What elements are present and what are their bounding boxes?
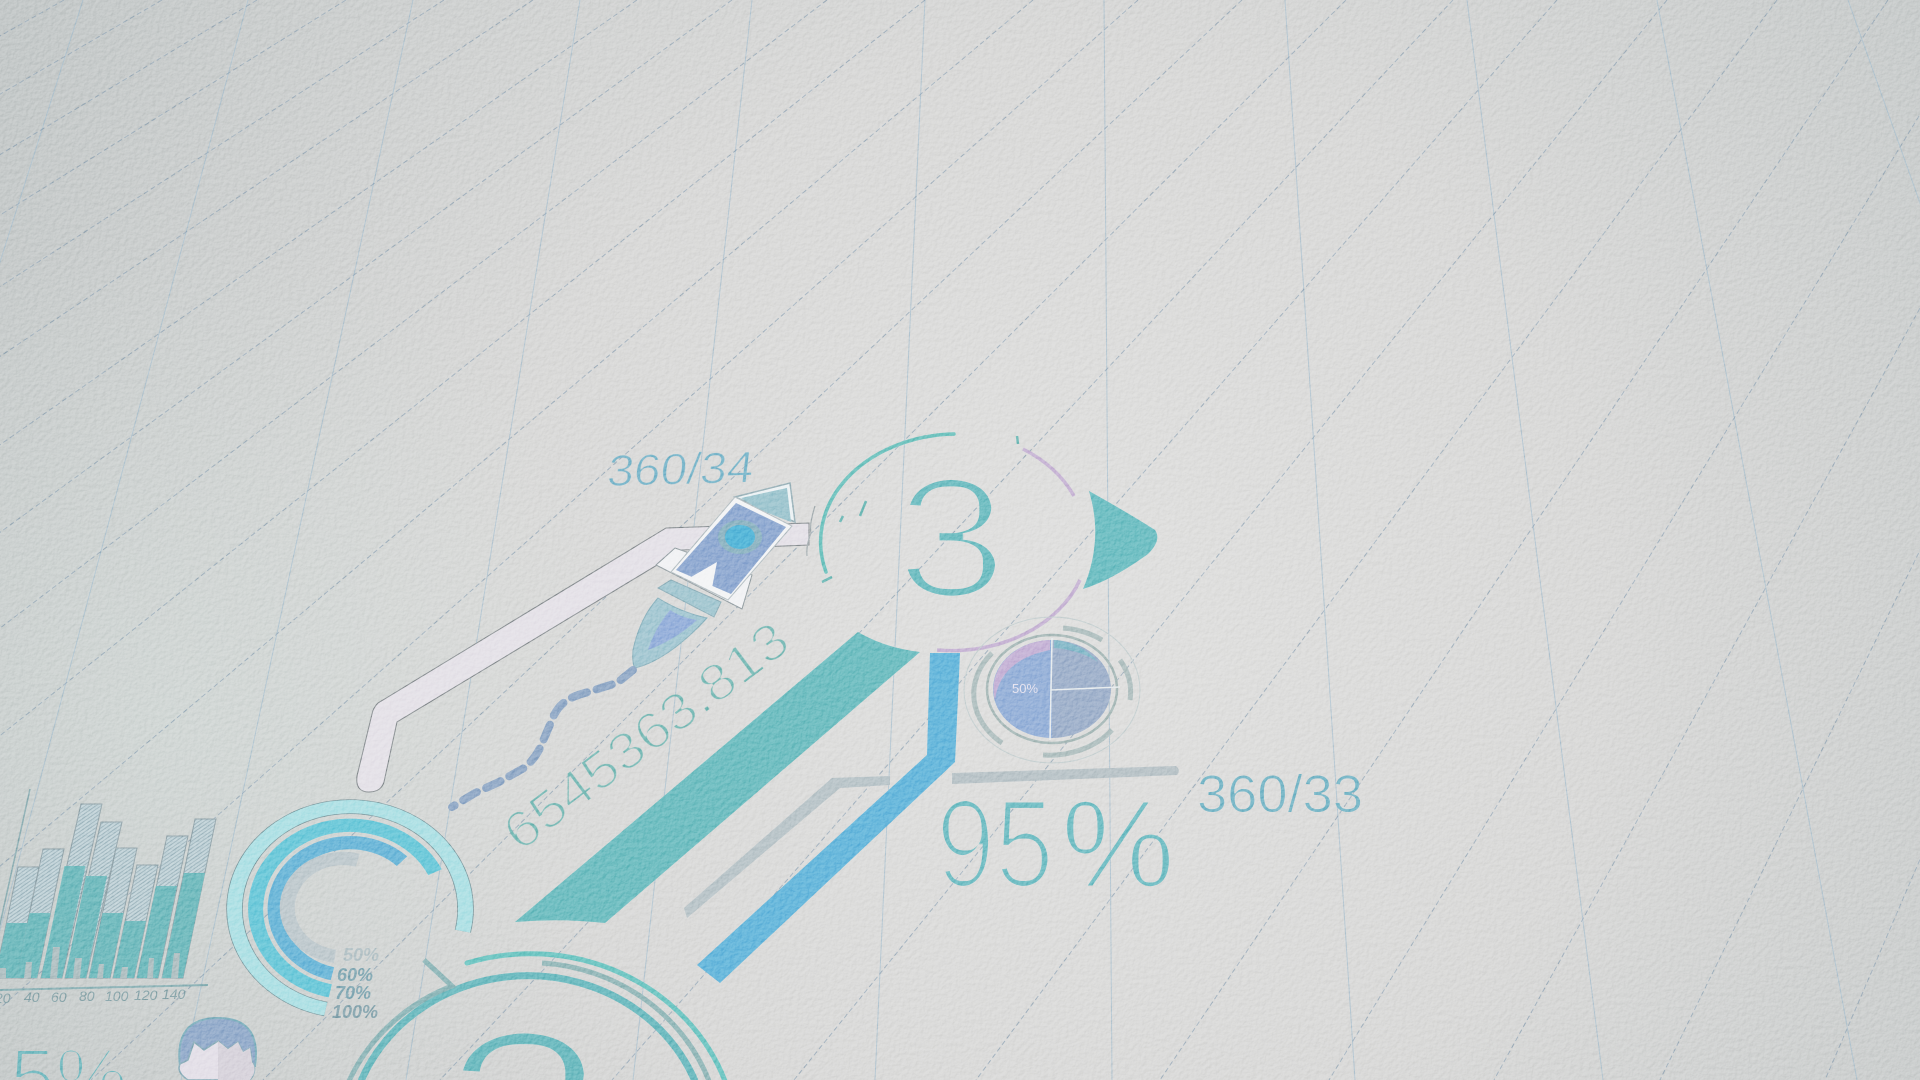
pie chart gauge: [964, 617, 1140, 763]
lavender lower arc: [937, 580, 1080, 651]
axis labels: 120: [134, 987, 158, 1003]
rocket engine band: [658, 580, 721, 617]
lavender crescent: [993, 640, 1050, 700]
outer decorative rings: [974, 628, 1131, 755]
grey bar: [952, 766, 1179, 784]
pie dividers: [1050, 638, 1120, 740]
teal diagonal band: [515, 632, 920, 923]
arc percentage labels: 70%: [335, 983, 371, 1003]
y axis: [0, 789, 30, 960]
outer teal arc: [467, 954, 725, 1080]
teal arc: [821, 434, 954, 572]
icon: rocket: [633, 483, 795, 668]
number 3: 3: [896, 442, 1007, 634]
main teal arc: [361, 976, 695, 1080]
icon: person head: [179, 1018, 256, 1080]
arc percentage labels: 50%: [343, 945, 379, 965]
arc 60%: [275, 843, 402, 974]
thin end bracket of connector: [807, 506, 815, 556]
hatched bars: [0, 804, 216, 978]
rocket body: [671, 497, 792, 600]
teal bars: [0, 866, 205, 978]
lavender upper arc: [1023, 449, 1074, 496]
x axis: [0, 985, 208, 990]
lower big circle with number 3: [349, 954, 725, 1080]
pie left half: [993, 640, 1052, 738]
blue elbow band: [697, 653, 960, 983]
arc 70%: [256, 825, 435, 991]
rocket flame: [633, 598, 707, 668]
dashed rocket trail: [452, 670, 633, 807]
grey elbow line: [684, 776, 890, 918]
bar chart: [0, 789, 216, 1006]
white elbow connector bar: [357, 523, 809, 792]
grey inner arc: [542, 963, 709, 1080]
rocket fins: [656, 548, 752, 609]
arc percentage labels: 60%: [337, 965, 373, 985]
tick marks: [822, 436, 1018, 582]
big circle with number 3: [821, 434, 1080, 651]
value: 95%: 95: [936, 775, 1054, 914]
arc 100%: [235, 807, 466, 1009]
face shade: [218, 1041, 255, 1080]
hair: [179, 1018, 256, 1066]
arc percentage labels: 100%: [332, 1002, 378, 1022]
radial progress chart: [235, 807, 466, 1022]
teal crescent: [1054, 640, 1098, 662]
value: 6545363.813: 6545363.813: [492, 610, 800, 863]
rocket porthole: [718, 520, 762, 554]
label: 360/33: 360/33: [1197, 765, 1363, 824]
value: 95%: [936, 775, 1175, 914]
axis labels: 100: [105, 988, 129, 1004]
axis labels: [0, 986, 186, 1006]
arc percentage labels: [332, 945, 379, 1022]
label: 360/34: 360/34: [605, 443, 756, 496]
face: [179, 1041, 255, 1080]
axis labels: 140: [162, 986, 186, 1002]
grey hook arc: [349, 960, 452, 1080]
value: 95%: %: [1061, 775, 1175, 914]
teal play arrow: [1083, 491, 1157, 589]
axis labels: 80: [79, 988, 95, 1004]
axis labels: 60: [51, 989, 67, 1005]
rocket nose: [735, 483, 795, 522]
small grey inset bars: [0, 947, 180, 978]
arc 50%: [287, 858, 358, 956]
pie label: 50%: [1012, 681, 1038, 696]
pie right half: [1052, 640, 1111, 738]
axis labels: 40: [24, 989, 40, 1005]
